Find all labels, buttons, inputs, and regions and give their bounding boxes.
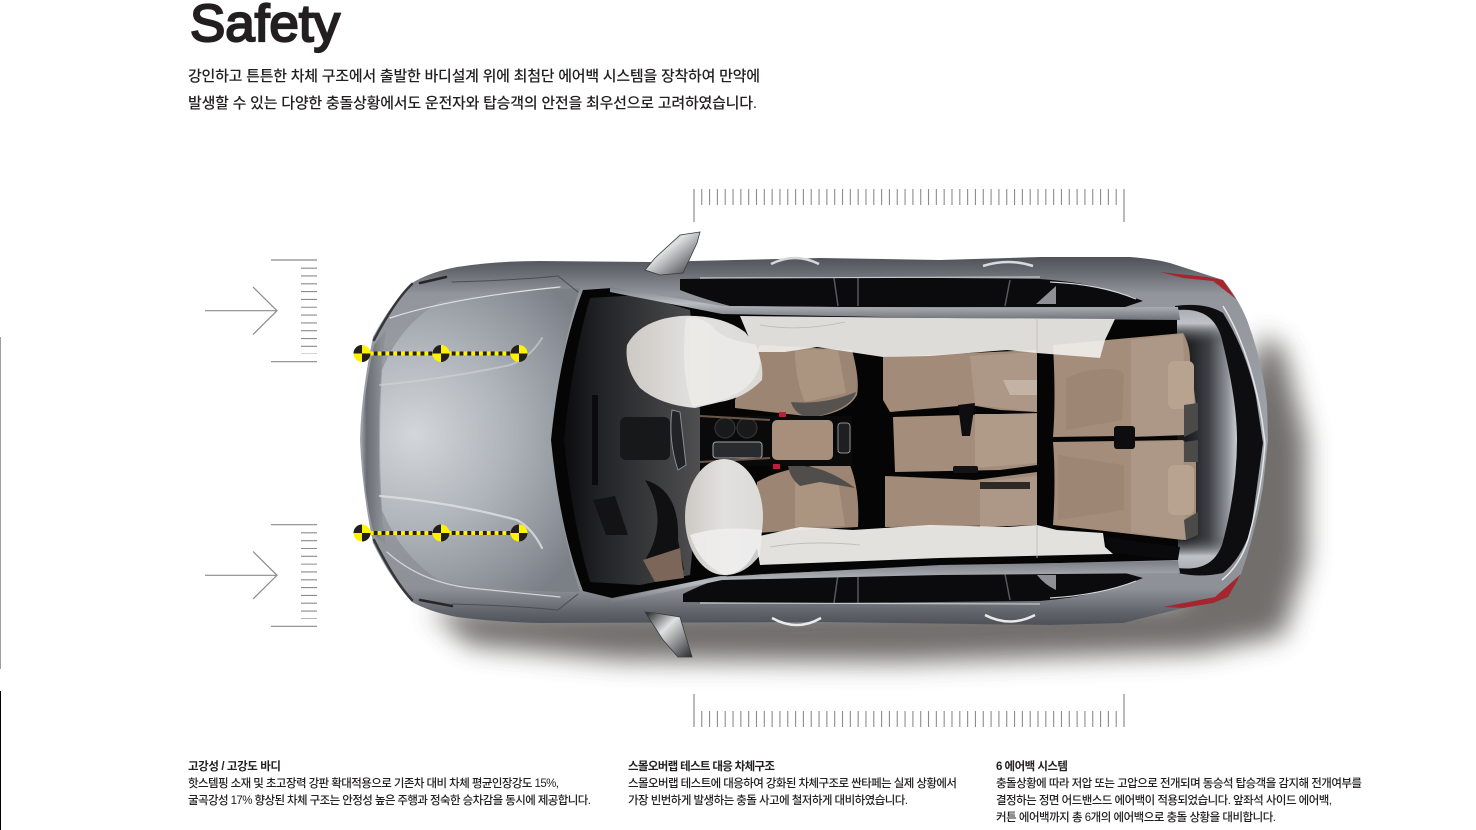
rear chrome edge	[1222, 306, 1265, 580]
hood highlights	[374, 276, 578, 610]
caption: six airbag system: 충돌상황에 따라 저압 또는 고압으로 전개되며 동승석 탑승객을 감지해 전개여부를	[996, 776, 1362, 790]
trunk floor	[1177, 310, 1237, 569]
rear hatch bottom surface	[1178, 530, 1226, 569]
caption: six airbag system	[996, 760, 1362, 824]
driver airbag	[627, 316, 762, 408]
front seat top	[735, 345, 858, 417]
intro paragraph	[188, 68, 760, 112]
door handles	[771, 258, 1035, 625]
steering column	[671, 410, 686, 470]
intro paragraph: 강인하고 튼튼한 차체 구조에서 출발한 바디설계 위에 최첨단 에어백 시스템을 장착하여 만약에	[188, 68, 760, 85]
roof rail top	[610, 287, 1180, 320]
intro paragraph: 발생할 수 있는 다양한 충돌상황에서도 운전자와 탑승객의 안전을 최우선으로 고려하였습니다.	[188, 95, 757, 112]
car illustration	[360, 232, 1306, 662]
caption: small overlap: 가장 빈번하게 발생하는 충돌 사고에 철저하게 대비하였습니다.	[628, 793, 908, 807]
front bumper band	[362, 330, 386, 545]
third row seat top	[1053, 333, 1198, 437]
tail light top	[1160, 272, 1236, 299]
caption: small overlap: 스몰오버랩 테스트에 대응하여 강화된 차체구조로 싼타페는 실제 상황에서	[628, 776, 957, 790]
caption: six airbag system: 커튼 에어백까지 총 6개의 에어백으로 충돌 상황을 대비합니다.	[996, 810, 1276, 824]
crash test markers lower	[354, 524, 528, 542]
window details	[700, 277, 1136, 604]
third row seat bottom	[1053, 440, 1198, 540]
rear hatch surround	[1175, 305, 1263, 576]
side window bottom	[683, 573, 1143, 603]
passenger airbag inner	[690, 528, 762, 575]
tail light bottom	[1163, 574, 1241, 608]
left edge sliver	[0, 337, 1, 830]
rear dark gap bottom	[1105, 537, 1180, 560]
left ruler lower	[271, 525, 317, 626]
car body	[360, 257, 1268, 625]
hood	[380, 288, 580, 592]
side window top	[680, 277, 1143, 307]
windshield interior	[564, 295, 700, 585]
bottom ruler	[694, 694, 1124, 727]
curtain airbag bottom	[755, 525, 1113, 565]
second row seats	[883, 350, 1037, 527]
front seat bottom	[757, 465, 858, 533]
caption: six airbag system: 결정하는 정면 어드밴스드 에어백이 적용되었습니다. 앞좌석 사이드 에어백,	[996, 794, 1332, 807]
crash test markers upper	[354, 345, 528, 362]
centre console	[700, 412, 852, 469]
curtain airbag top	[740, 316, 1115, 358]
arrow upper	[205, 287, 277, 334]
roof rail bottom	[610, 561, 1180, 604]
caption: six airbag system: 6 에어백 시스템	[996, 760, 1068, 773]
caption: high strength body	[188, 760, 591, 807]
driver airbag inner fold	[684, 318, 760, 406]
caption: high strength body: 핫스템핑 소재 및 초고장력 강판 확대적용으로 기존차 대비 차체 평균인장강도 15%,	[188, 776, 559, 790]
mirror bottom	[645, 612, 692, 657]
mirror top	[645, 232, 700, 275]
curtain airbag folds	[760, 318, 1037, 558]
arrow lower	[205, 552, 277, 599]
dashboard details	[592, 395, 684, 582]
top ruler	[694, 189, 1124, 222]
car ground shadow	[430, 335, 1306, 662]
rear hatch top surface	[1177, 310, 1226, 352]
caption: small overlap	[628, 759, 957, 807]
caption: high strength body: 굴곡강성 17% 향상된 차체 구조는 안정성 높은 주행과 정숙한 승차감을 동시에 제공합니다.	[188, 793, 591, 807]
left ruler upper	[271, 260, 317, 362]
passenger airbag	[685, 459, 763, 575]
caption: high strength body: 고강성 / 고강도 바디	[188, 760, 281, 773]
seat latch	[1114, 426, 1135, 449]
caption: small overlap: 스몰오버랩 테스트 대응 차체구조	[628, 759, 775, 773]
cabin opening	[551, 288, 1198, 598]
